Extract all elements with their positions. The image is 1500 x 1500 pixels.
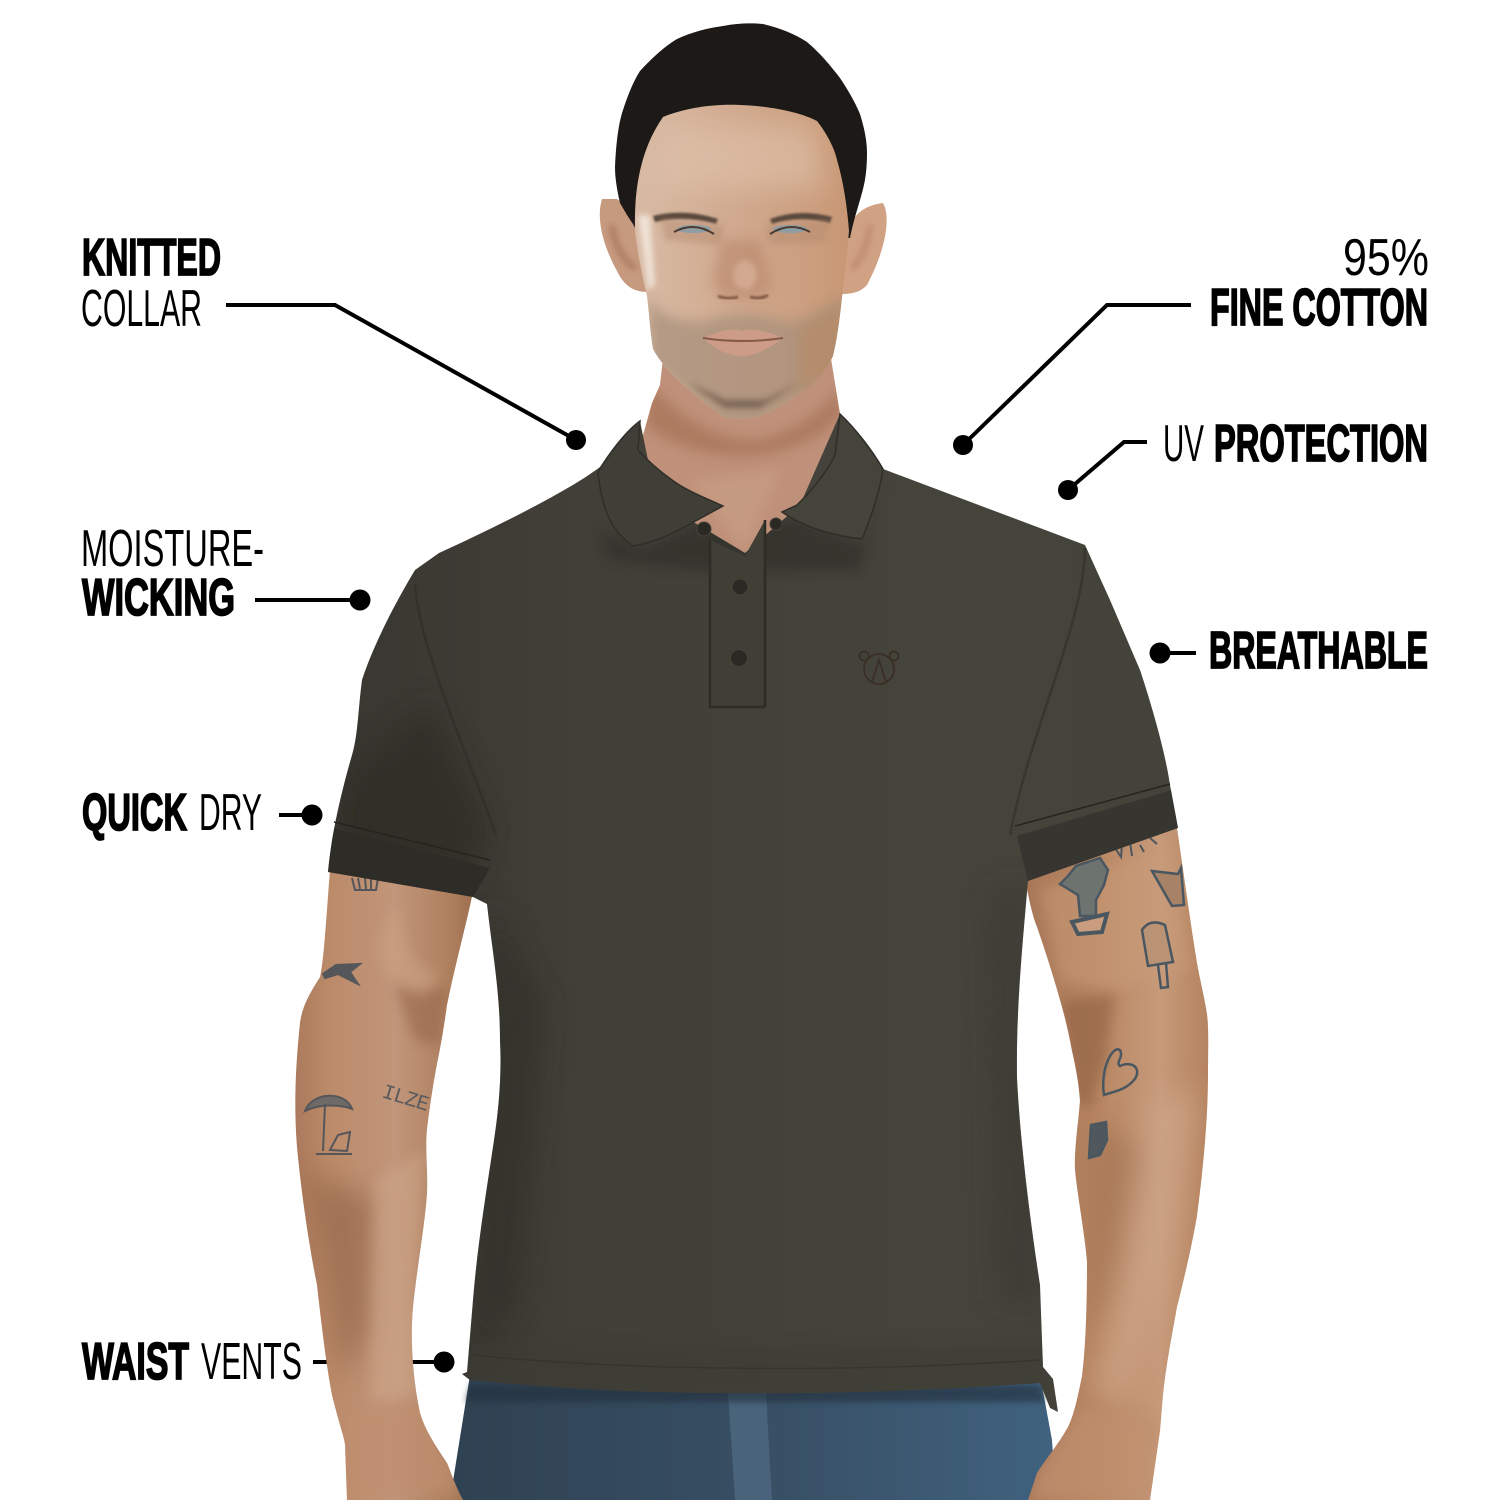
tattoo: umbrella and deck chair	[305, 1096, 352, 1154]
polo shirt	[320, 410, 1190, 1420]
lips	[703, 330, 783, 356]
heading: WICKING: WICKING	[82, 569, 235, 627]
label: knitted collar	[81, 229, 586, 450]
eye sockets	[660, 218, 830, 245]
armhole seams	[415, 585, 496, 835]
tattoo: small figure	[1089, 1122, 1107, 1158]
callout line: waist vents (passes behind forearm)	[313, 1352, 454, 1372]
label: breathable	[1150, 622, 1428, 680]
callout line	[1150, 642, 1196, 664]
hair	[615, 23, 867, 238]
model figure wearing polo shirt	[290, 23, 1215, 1500]
buttons	[697, 518, 782, 666]
tattoo: cactus in pot	[1060, 858, 1108, 934]
callout line	[226, 305, 586, 450]
shirt body and sleeves	[320, 410, 1190, 1420]
tattoos: left forearm	[305, 878, 432, 1154]
callout line	[279, 804, 322, 826]
tattoo: broken heart	[1103, 1049, 1137, 1095]
heading: KNITTED: KNITTED	[82, 229, 221, 287]
tattoo: ILZE lettering: ILZE	[379, 1082, 432, 1118]
tattoo: fish	[323, 964, 360, 984]
jeans	[450, 1375, 1056, 1500]
label: quick dry	[82, 784, 322, 842]
label: UV protection	[1058, 415, 1428, 500]
face	[630, 100, 855, 425]
nose	[712, 240, 772, 298]
heading: QUICK: QUICK	[82, 784, 187, 842]
tattoo: dog	[1152, 868, 1184, 906]
text: 95%: 95%	[1343, 229, 1429, 287]
callout line	[1058, 442, 1147, 500]
heading: WAIST: WAIST	[82, 1333, 189, 1391]
right cuff	[1017, 790, 1178, 881]
tattoo: sun rays at sleeve	[1113, 838, 1157, 857]
text: MOISTURE-: MOISTURE-	[81, 520, 264, 578]
ears	[600, 199, 887, 294]
left arm	[290, 860, 480, 1500]
left collar	[598, 421, 723, 546]
neck	[643, 360, 840, 553]
text: DRY: DRY	[199, 784, 262, 842]
tattoos: right forearm	[1060, 838, 1184, 1158]
right arm	[1020, 820, 1215, 1500]
forehead highlight	[655, 125, 825, 190]
bear logo emblem	[860, 652, 898, 684]
text: COLLAR: COLLAR	[81, 280, 202, 338]
beard stubble	[648, 295, 845, 425]
cuff seam lines	[334, 784, 1170, 860]
left cuff	[328, 828, 490, 897]
text: VENTS: VENTS	[201, 1333, 302, 1391]
callout line	[953, 305, 1191, 455]
right collar	[782, 414, 883, 539]
hem stitching	[472, 1355, 1040, 1368]
cheek highlight	[638, 215, 655, 290]
brows	[653, 213, 718, 224]
callout line	[255, 590, 370, 610]
label: waist vents	[82, 1333, 302, 1391]
tattoo: popsicle	[1142, 922, 1173, 988]
label: 95% fine cotton	[953, 229, 1429, 455]
text: UV: UV	[1163, 415, 1204, 473]
shirt shading	[335, 470, 1050, 1400]
placket	[710, 520, 765, 707]
eyes	[677, 225, 711, 233]
tattoo: marks at sleeve	[352, 878, 378, 890]
label: moisture-wicking	[81, 520, 370, 627]
